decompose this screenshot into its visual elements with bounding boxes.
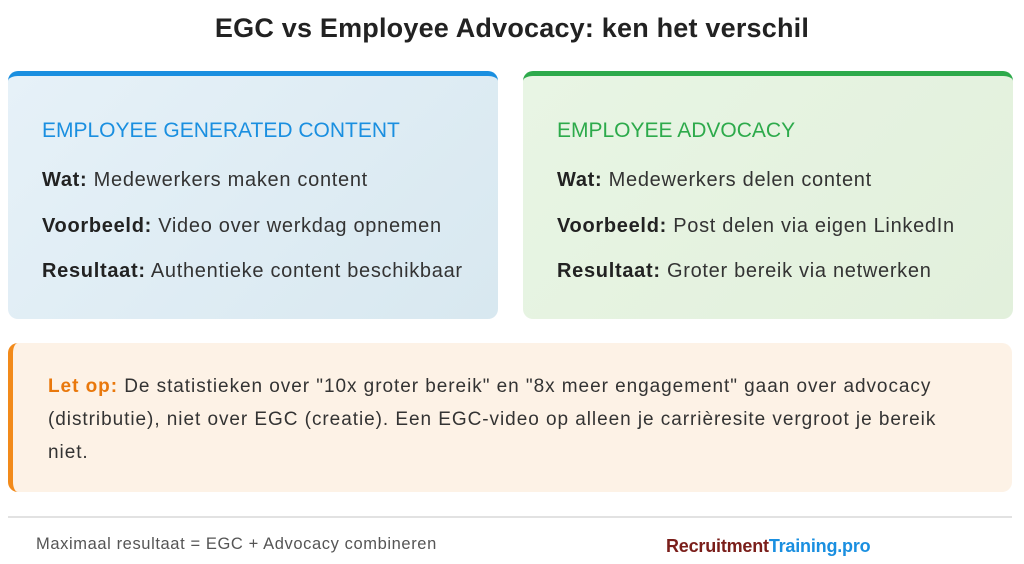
callout: let op: niet.: [48, 442, 89, 463]
text: resultaat: Resultaat: Authentieke content beschikbaar: [42, 260, 463, 282]
callout: let op: (distributie), niet over EGC (creatie). Een EGC-video op alleen je carrièresite vergroot je bereik: [48, 409, 936, 430]
logo: RecruitmentTraining.pro: [666, 536, 870, 556]
footer text: Maximaal resultaat = EGC + Advocacy combineren: [36, 535, 437, 553]
text: resultaat: Resultaat: Groter bereik via netwerken: [557, 260, 932, 282]
title: EGC vs Employee Advocacy: ken het verschil: [215, 13, 809, 43]
panel: employee advocacy: [523, 71, 1013, 319]
callout: let op: Let op: De statistieken over "10x groter bereik" en "8x meer engagement" gaan over advocacy: [48, 376, 931, 397]
panel: employee generated content: [8, 71, 498, 319]
heading: advocacy: EMPLOYEE ADVOCACY: [557, 119, 795, 142]
callout: let op: [8, 343, 1012, 492]
text: wat: Wat: Medewerkers maken content: [42, 169, 368, 191]
text: voorbeeld: Voorbeeld: Post delen via eigen LinkedIn: [557, 215, 955, 237]
text: wat: Wat: Medewerkers delen content: [557, 169, 872, 191]
text: voorbeeld: Voorbeeld: Video over werkdag opnemen: [42, 215, 442, 237]
heading: EGC: EMPLOYEE GENERATED CONTENT: [42, 119, 400, 142]
